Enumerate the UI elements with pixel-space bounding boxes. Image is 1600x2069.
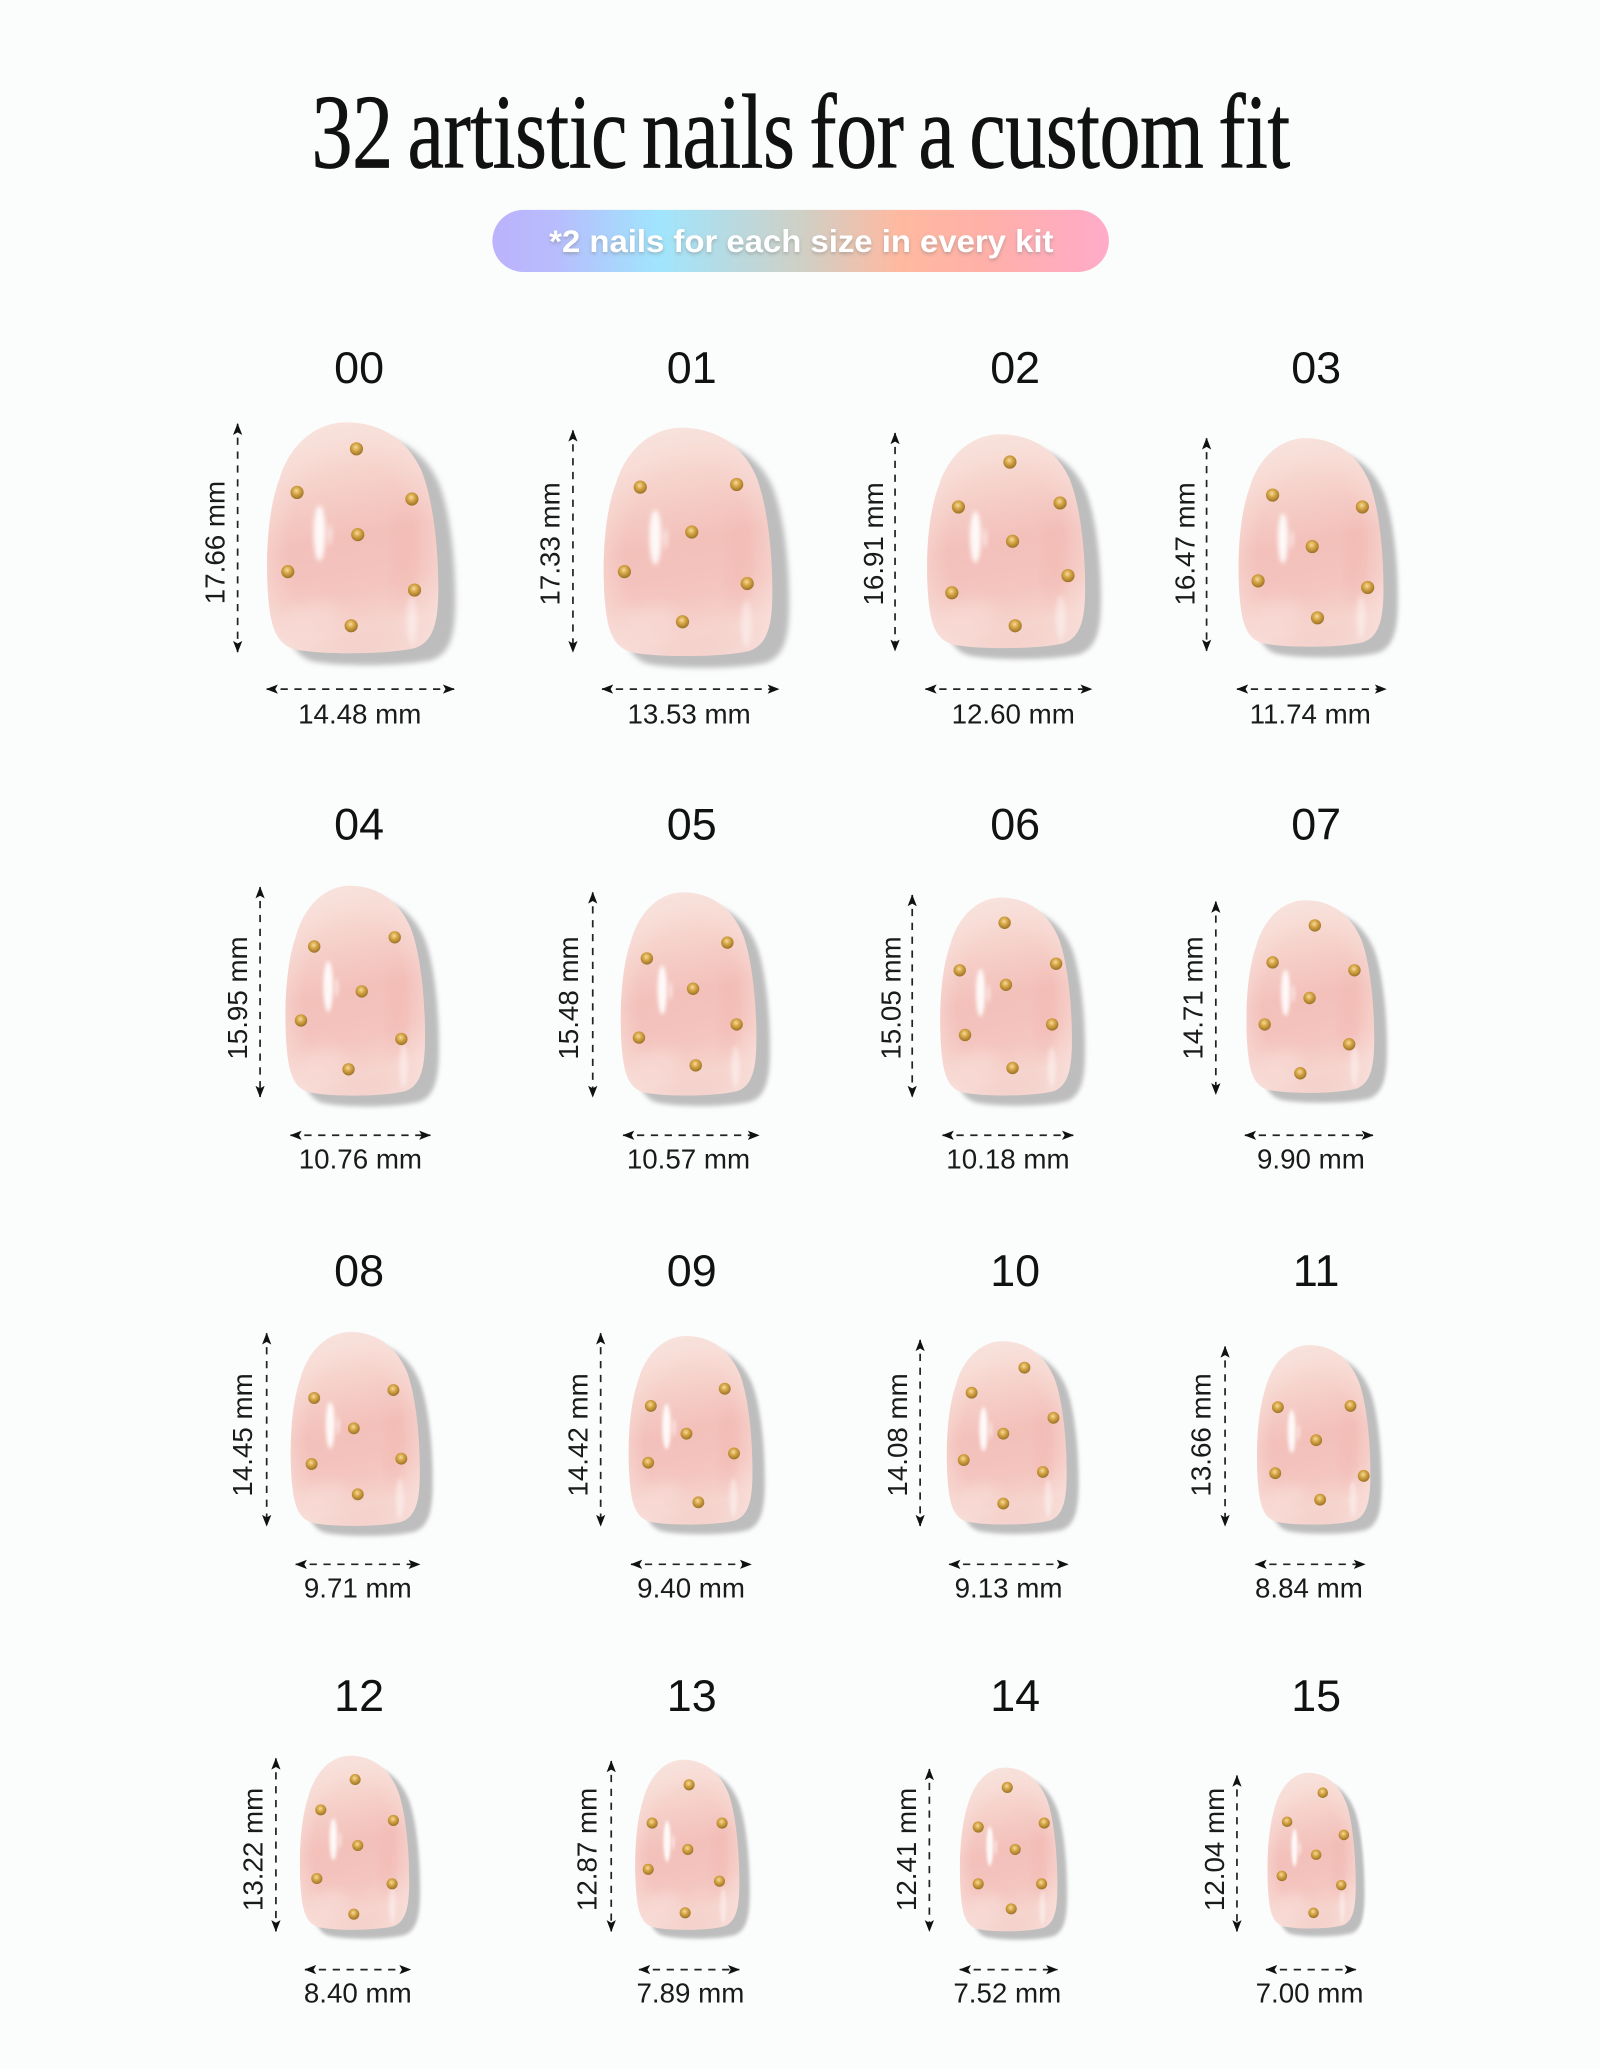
size number 01: 01 — [667, 342, 717, 393]
width 13.53 mm: 13.53 mm — [627, 698, 751, 729]
height 16.47 mm: 16.47 mm — [1170, 482, 1201, 606]
beads 13 — [643, 1779, 728, 1918]
nail 01 — [604, 428, 789, 668]
height 15.05 mm: 15.05 mm — [875, 936, 906, 1060]
pill badge: 2 nails per size — [492, 210, 1109, 272]
nail 07 — [1246, 900, 1387, 1103]
width 10.18 mm: 10.18 mm — [946, 1143, 1070, 1174]
size number 06: 06 — [990, 799, 1040, 850]
width 10.57 mm: 10.57 mm — [627, 1143, 750, 1174]
size number 12: 12 — [334, 1670, 384, 1721]
width 7.89 mm: 7.89 mm — [637, 1978, 744, 2009]
panel: size 11 — [1186, 1245, 1382, 1603]
title: 32 artistic nails for a custom fit — [312, 74, 1290, 191]
width 14.48 mm: 14.48 mm — [298, 698, 421, 729]
beads 00 — [281, 442, 421, 632]
width 9.90 mm: 9.90 mm — [1257, 1143, 1365, 1174]
size number 13: 13 — [667, 1670, 717, 1721]
nail 13 — [635, 1760, 750, 1939]
width 9.90 mm — [1245, 1135, 1373, 1174]
panel: size 06 — [875, 799, 1085, 1174]
panel: size 10 — [882, 1245, 1079, 1603]
nail 08 — [291, 1332, 433, 1536]
size number 15: 15 — [1291, 1670, 1341, 1721]
panel: size 01 — [535, 342, 789, 729]
beads 10 — [958, 1362, 1059, 1510]
panel: size 02 — [858, 342, 1101, 729]
size number 11: 11 — [1293, 1245, 1339, 1296]
panel: size 15 — [1199, 1670, 1365, 2009]
height 14.45 mm: 14.45 mm — [227, 1373, 258, 1497]
height 17.66 mm: 17.66 mm — [199, 481, 230, 604]
beads 15 — [1277, 1787, 1349, 1918]
nail 02 — [927, 434, 1101, 659]
nail 15 — [1268, 1773, 1365, 1937]
height 12.87 mm: 12.87 mm — [572, 1788, 603, 1911]
nail 04 — [285, 886, 439, 1106]
nail 10 — [947, 1341, 1079, 1534]
width 7.00 mm: 7.00 mm — [1256, 1978, 1363, 2009]
beads 09 — [642, 1383, 740, 1508]
width 8.40 mm: 8.40 mm — [304, 1978, 412, 2009]
height 12.41 mm: 12.41 mm — [891, 1788, 922, 1911]
size number 00: 00 — [334, 342, 384, 393]
panel: size 07 — [1178, 799, 1387, 1174]
beads 02 — [945, 455, 1075, 632]
panel: size 09 — [562, 1245, 765, 1603]
height 12.04 mm: 12.04 mm — [1199, 1788, 1230, 1911]
height 14.42 mm: 14.42 mm — [562, 1373, 593, 1497]
width 12.60 mm: 12.60 mm — [952, 698, 1075, 729]
width 11.74 mm: 11.74 mm — [1250, 698, 1371, 729]
height 14.71 mm: 14.71 mm — [1178, 936, 1209, 1060]
width 9.71 mm: 9.71 mm — [304, 1572, 412, 1603]
height 15.48 mm: 15.48 mm — [553, 936, 584, 1060]
nail 14 — [960, 1768, 1067, 1940]
size number 14: 14 — [990, 1670, 1040, 1721]
height 17.33 mm: 17.33 mm — [535, 482, 566, 606]
beads 03 — [1251, 488, 1374, 624]
panel: size 13 — [572, 1670, 750, 2009]
width 8.84 mm: 8.84 mm — [1255, 1572, 1363, 1603]
panel: size 04 — [222, 799, 439, 1174]
panel: size 12 — [238, 1670, 420, 2009]
panel: size 08 — [227, 1245, 433, 1603]
nail 05 — [621, 892, 770, 1106]
pill badge: 2 nails per size: *2 nails for each size in every kit — [549, 223, 1054, 259]
size number 02: 02 — [990, 342, 1040, 393]
panel: size 00 — [199, 342, 455, 729]
height 16.91 mm: 16.91 mm — [858, 482, 889, 606]
width 9.71 mm — [296, 1564, 420, 1603]
beads 05 — [633, 936, 743, 1072]
beads 07 — [1258, 919, 1361, 1079]
size number 07: 07 — [1291, 799, 1341, 850]
beads 08 — [306, 1384, 407, 1500]
size number 10: 10 — [990, 1245, 1040, 1296]
beads 12 — [311, 1774, 399, 1920]
panel: size 05 — [553, 799, 770, 1174]
nail 11 — [1257, 1345, 1382, 1534]
nail 06 — [940, 898, 1085, 1106]
size number 03: 03 — [1291, 342, 1341, 393]
beads 04 — [295, 931, 408, 1075]
height 15.95 mm: 15.95 mm — [222, 936, 253, 1060]
nail 03 — [1239, 438, 1398, 657]
beads 11 — [1269, 1400, 1370, 1506]
width 10.76 mm: 10.76 mm — [299, 1143, 422, 1174]
size number 05: 05 — [667, 799, 717, 850]
nail 09 — [629, 1336, 765, 1534]
width 9.40 mm: 9.40 mm — [637, 1572, 745, 1603]
beads 06 — [954, 917, 1062, 1074]
height 13.22 mm: 13.22 mm — [238, 1788, 269, 1911]
size number 09: 09 — [667, 1245, 717, 1296]
size number 08: 08 — [334, 1245, 384, 1296]
panel: size 14 — [891, 1670, 1067, 2009]
size number 04: 04 — [334, 799, 384, 850]
width 7.52 mm: 7.52 mm — [953, 1978, 1061, 2009]
width 9.13 mm: 9.13 mm — [955, 1572, 1062, 1603]
panel: size 03 — [1170, 342, 1398, 729]
height 13.66 mm: 13.66 mm — [1186, 1373, 1217, 1497]
nail 12 — [300, 1756, 420, 1939]
height 14.08 mm: 14.08 mm — [882, 1373, 913, 1497]
nail 00 — [267, 422, 455, 665]
beads 14 — [973, 1782, 1050, 1914]
beads 01 — [618, 478, 754, 628]
